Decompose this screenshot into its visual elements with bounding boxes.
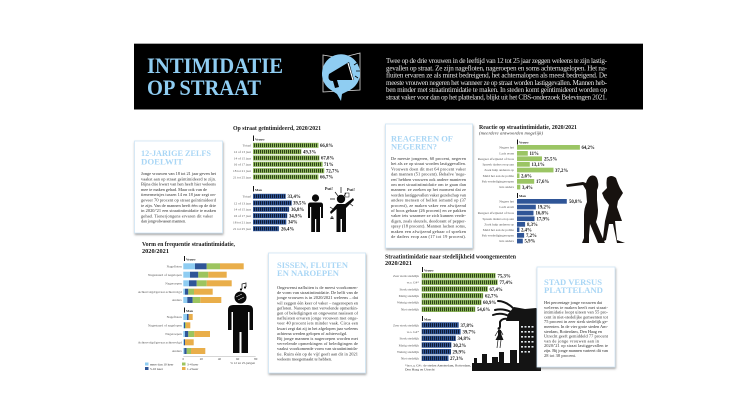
body text: vervelende opmerkingen of beledigingen de [277, 341, 358, 346]
bars: man: 37,8% [460, 324, 474, 329]
body text: de vorm van straatintimidatie. De helft van de [277, 290, 358, 295]
bars: man: Weinig stedelijk [397, 350, 419, 354]
bars: vrouw: Reageer afwijzend of boos [478, 157, 515, 161]
body text: spray (18 procent). Mannen lachen soms, [391, 224, 466, 230]
body text: Vrouwen doen dit met 64 procent vaker [391, 166, 467, 171]
bars: vrouw: 18 tot 21 jaar [233, 169, 252, 173]
heading: REAGEREN OF [391, 134, 453, 144]
legend [145, 362, 199, 371]
icon: vrouw: Vrouw [255, 138, 265, 142]
body text: maken een afwijzend gebaar of spreken [391, 229, 467, 234]
bars: man: 18 tot 21 jaar [233, 220, 252, 224]
icon: man: Man [255, 188, 262, 192]
stacked bars: man: Nagestaard of nagelopen [148, 324, 182, 328]
bars: vrouw: 49,3% [303, 150, 316, 155]
heading: PLATTELAND [544, 285, 603, 295]
bars: vrouw: Negeer het [499, 146, 514, 150]
heading: SISSEN, FLUITEN [277, 260, 349, 270]
bars: man: 14 of 15 jaar [234, 208, 252, 212]
body text: Jonge vrouwen van 18 tot 21 jaar geven het [141, 171, 217, 176]
bars: man: 34% [288, 221, 298, 226]
bars: vrouw: Matig stedelijk [399, 294, 419, 298]
bars: vrouw: 21 tot 25 jaar [233, 175, 252, 179]
bars: man: 27,3% [450, 357, 463, 362]
title [147, 53, 283, 100]
axis: 80 [254, 357, 258, 361]
icon: standing person [308, 194, 323, 232]
body text: kwart zegt dat zij in het afgelopen jaar weleens [277, 326, 358, 331]
bars: man: Negeer het [499, 200, 514, 204]
chart title [142, 241, 235, 255]
bars: man: w.o. G4* [407, 330, 419, 334]
bars: vrouw: 77,4% [500, 281, 513, 286]
bars: man: Zeer sterk stedelijk [393, 323, 419, 327]
bars: vrouw: Iets anders [499, 185, 515, 189]
chart title: Vorm en frequentie straatintimidatie, [142, 241, 235, 248]
body text: vaakst voorkomende vorm van straatintimida- [277, 346, 359, 351]
bars: vrouw: Totaal [243, 144, 251, 148]
body text: dan mannen (51 procent). Behalve 'nege- [391, 172, 467, 177]
chart title: Reactie op straatintimidatie, 2020/2021 [479, 124, 577, 131]
body text: mee te maken gehad. Maar ook van de [141, 187, 207, 192]
body text: procent), ze maken vaker een afwijzend [391, 203, 467, 209]
bars: man [478, 199, 582, 245]
body text: mannen: ze zoeken op het moment dat ze [391, 187, 466, 192]
bars: man: Pak verdedigingswapen [482, 234, 514, 238]
bars: vrouw: 67,8% [321, 157, 334, 162]
bars: man [233, 194, 306, 232]
bars: man: 17,9% [536, 217, 550, 222]
bars: man: Iets anders [499, 239, 515, 243]
bars: vrouw: 11% [530, 152, 539, 157]
body text: of boos gebaar (26 procent) en ze pakken [391, 208, 467, 213]
body text [544, 300, 609, 358]
legend: 5-10 keer [150, 367, 164, 371]
chart title: 2020/2021 [385, 260, 412, 267]
heading: EN NAROEPEN [277, 268, 340, 278]
panel: stad versus platteland [537, 267, 615, 367]
chart: op straat geïntimideerd [233, 125, 339, 232]
icon: vrouw: Vrouw [519, 140, 529, 144]
intro text: ben minder met straatintimidatie te maken. In steden komt geïntimideerd worden op [386, 86, 607, 94]
title: OP STRAAT [147, 75, 261, 100]
footnote: *in o.a. G4 : de steden Amsterdam, Rotterdam, [405, 363, 471, 368]
bars: vrouw: 71% [324, 163, 334, 168]
icon: two women silhouettes [566, 175, 625, 243]
bars: vrouw: 72,7% [326, 169, 339, 174]
icon: city with giant claw [472, 301, 541, 371]
icon: man: Man [424, 318, 431, 322]
body text: wil zeggen één keer of vaker – nageroepen en [277, 300, 359, 305]
bars: vrouw: 66,8% [320, 144, 333, 149]
body text: vaakst aan op straat geïntimideerd te zijn. [141, 176, 216, 181]
bars: man: Matig stedelijk [399, 343, 419, 347]
stacked bars: vrouw [138, 263, 244, 303]
bars: vrouw [478, 145, 595, 191]
body text [276, 285, 359, 361]
body text: digen, zoals sleutels, deodorant of pepper- [391, 218, 467, 224]
body text: Het percentage jonge vrouwen dat [544, 300, 603, 305]
chart: naar stedelijkheid [385, 254, 517, 371]
bars: man: 39,5% [293, 202, 306, 207]
stacked bars: man [138, 314, 210, 354]
bars: vrouw: 16 of 17 jaar [234, 163, 252, 167]
body text: zijn. Bij jonge mannen varieert dit van [544, 348, 609, 353]
body text: 28 tot 38 procent. [544, 353, 576, 358]
heading [277, 260, 349, 278]
bars: vrouw [393, 273, 513, 313]
bars: vrouw: 75,3% [498, 274, 511, 280]
body text: geveer 70 procent op straat geïntimideerd [141, 198, 217, 202]
panel: sissen, fluiten en naroepen [268, 253, 366, 373]
footnote [405, 363, 471, 371]
chart title [479, 124, 577, 136]
panel: 12-jarige zelfs doelwit [134, 141, 222, 233]
heading [391, 134, 453, 152]
heading [544, 277, 603, 295]
body text: ren' hebben vrouwen ook andere manieren [391, 177, 467, 182]
bars: vrouw: 25,5% [544, 158, 557, 162]
bars: vrouw: 2,6% [521, 174, 532, 180]
axis: 60 [236, 357, 240, 361]
bars: man: 7,2% [526, 234, 537, 239]
bars: man: 2,4% [521, 228, 532, 233]
bars: man: 29,9% [452, 350, 466, 356]
icon: vrouw: Vrouw [424, 268, 434, 272]
bars: vrouw: Pak verdedigingswapen [482, 180, 514, 184]
bars: man: 19,2% [538, 206, 551, 211]
bars: man: 36,8% [291, 208, 304, 213]
axis: 20 [200, 357, 203, 361]
chart title: (meerdere antwoorden mogelijk) [479, 130, 543, 136]
body text: meenten. In de vier grote steden Am- [544, 324, 609, 329]
bars: man: 30,2% [453, 344, 466, 349]
bars: man: 50,8% [569, 200, 582, 205]
bars: vrouw: 64,2% [582, 146, 595, 151]
bars: man: 26,4% [281, 227, 294, 232]
body text [391, 156, 467, 239]
bars: vrouw: 3,4% [522, 186, 533, 191]
axis: 40 [218, 357, 222, 361]
body text: cent in niet-stedelijke gemeenten tot [544, 314, 609, 319]
intro text [386, 57, 608, 102]
icon: person with music [228, 283, 253, 353]
bars: man: 33,4% [288, 195, 301, 200]
body text: De meeste jongeren, 60 procent, negeren [391, 156, 467, 162]
bars: vrouw: w.o. G4* [407, 281, 419, 285]
body text: jonge vrouwen is in 2020/2021 weleens – dat [276, 295, 359, 300]
body text: Utrecht geeft gemiddeld 77 procent [544, 334, 609, 339]
bars: vrouw: 67,4% [490, 288, 503, 293]
stacked bars: man: Nageroepen [165, 332, 182, 336]
body text: te zijn. Van de mannen heeft één op de drie [141, 203, 216, 208]
intro text: meeste vrouwen negeren het wanneer ze op straat worden lastiggevallen. Mannen heb- [386, 79, 608, 87]
body text: om met straatintimidatie om te gaan dan [391, 182, 467, 187]
icon: shouting person: Psst! [325, 187, 333, 191]
intro text: straat vaker voor dan op het platteland, blijkt uit het CBS-onderzoek Belevingen 2021. [386, 94, 607, 102]
body text: Bijna drie kwart van hen heeft hier weleens [141, 182, 216, 187]
bars: vrouw: Zeer sterk stedelijk [393, 274, 419, 278]
bars: man: Spreek daders erop aan [482, 217, 514, 221]
heading: STAD VERSUS [544, 277, 602, 287]
body text: van de jonge vrouwen aan in [544, 338, 600, 343]
body text: nafluisten ervaren jonge vrouwen met onge- [277, 316, 359, 321]
body text: tie. Ruim één op de vijf geeft aan dit in 2021 [277, 351, 358, 356]
bars: man: Totaal [243, 195, 251, 199]
bars: vrouw: Niet stedelijk [401, 308, 419, 312]
chart title: 2020/2021 [142, 248, 169, 255]
legend: meer dan 10 keer [150, 362, 174, 366]
chart: vorm en frequentie [138, 241, 258, 371]
bars: vrouw: 14 of 15 jaar [234, 156, 252, 160]
chart title [385, 254, 517, 267]
bars: man: Sterk stedelijk [400, 337, 419, 341]
chart: reactie op straatintimidatie [478, 124, 595, 245]
bars: vrouw: Sterk stedelijk [400, 287, 419, 291]
bars: man [393, 322, 476, 362]
stacked bars: vrouw: Anders [172, 298, 182, 302]
bars: vrouw: Spreek daders erop aan [482, 162, 514, 166]
bars: man: 16,8% [536, 212, 549, 217]
bars: vrouw: Weinig stedelijk [397, 301, 419, 305]
heading [141, 148, 211, 166]
stacked bars: vrouw: Achtervolgd/gevaar achtervolgd [138, 290, 182, 294]
axis: % 12 tot 25-jarigen [230, 361, 255, 365]
bars: man: Zoek hulp anderen op [484, 222, 514, 226]
chart title: Op straat geïntimideerd, 2020/2021 [233, 125, 321, 132]
body text: tienermeisjes tussen 14 en 18 jaar zegt on- [141, 192, 217, 197]
icon: shouting person [325, 187, 355, 232]
body text: gen of beledigingen en ongewenst nasissen of [277, 310, 359, 316]
stacked bars: man: Anders [172, 349, 182, 353]
bars: vrouw: 12 of 13 jaar [234, 150, 252, 154]
body text: veer 40 procent iets minder vaak. Circa een [277, 321, 359, 326]
icon: man: Man [519, 194, 526, 198]
panel: reageren of negeren [386, 124, 472, 248]
bars: vrouw: Zoek hulp anderen op [484, 168, 514, 172]
bars: vrouw: Lach erom [499, 152, 514, 156]
axis: 0 [183, 357, 185, 361]
body text: de daders erop aan (17 tot 19 procent). [391, 234, 466, 239]
stacked bars: man: Nagefloten [167, 315, 182, 319]
title: INTIMIDATIE [147, 53, 283, 78]
bars: vrouw: 66,7% [320, 176, 333, 181]
bars: vrouw [233, 143, 339, 181]
bars: vrouw: 37,2% [555, 169, 568, 174]
bars: vrouw: 60,9% [483, 301, 496, 306]
body text: Ongewenst nafluiten is de meest voorkomen- [277, 285, 359, 290]
legend: 1-2 keer [187, 367, 199, 371]
bars: man: 21 tot 25 jaar [233, 227, 252, 231]
body text: vaker iets waarmee ze zich kunnen verde- [391, 213, 467, 218]
icon: vrouw: Vrouw [186, 258, 196, 262]
stacked bars: vrouw: Nagestaard of nagelopen [148, 273, 182, 277]
stacked bars: vrouw: Nageroepen [165, 282, 182, 286]
footnote: Den Haag en Utrecht [405, 367, 435, 371]
body text: Bij jonge mannen is nageroepen worden met [277, 336, 359, 341]
bars: man: 34,9% [289, 214, 302, 219]
axis [183, 356, 258, 365]
header banner [134, 43, 643, 110]
bars: man: Reageer afwijzend of boos [478, 211, 515, 215]
bars: man: Meld het aan de politie [483, 228, 514, 232]
bars: man: 34,8% [458, 337, 471, 342]
bars: vrouw: 13,1% [532, 163, 545, 168]
intro text: gevallen op straat. Ze zijn nagefloten, nageroepen en soms achternagelopen. Het na- [386, 64, 608, 72]
bars: man: 16 of 17 jaar [234, 214, 252, 218]
heading: NEGEREN? [391, 142, 437, 152]
icon: megaphone [322, 53, 360, 101]
body text: 2020/'21 op straat lastiggevallen te [544, 343, 608, 348]
bars: vrouw: 17,6% [536, 180, 549, 185]
bars: vrouw: Meld het aan de politie [483, 174, 514, 178]
bars: man: Niet stedelijk [401, 357, 419, 361]
body text: weleens meegemaakt te hebben. [277, 356, 332, 361]
heading: DOELWIT [141, 156, 183, 166]
body text: worden lastiggevallen vaker gezelschap van [391, 192, 467, 197]
body text: intimidatie loopt uiteen van 55 pro- [544, 310, 609, 315]
bars: man: 12 of 13 jaar [234, 201, 252, 205]
intro text: fluiten ervaren ze als minst bedreigend, het achternalopen als meest bedreigend. De [386, 72, 607, 80]
body text [141, 171, 217, 224]
heading: 12-JARIGE ZELFS [141, 148, 211, 158]
bars: man: Lach erom [499, 205, 514, 209]
icon: shouting person: Psst! [347, 188, 355, 192]
icon: man: Man [186, 309, 193, 313]
bars: vrouw: 54,6% [477, 308, 490, 313]
body text: dan jongvolwassen mannen. [141, 219, 186, 224]
body text: het als ze op straat worden lastiggevallen. [391, 161, 466, 166]
stacked bars: vrouw: Nagefloten [167, 264, 182, 268]
body text: sterdam, Rotterdam, Den Haag en [544, 329, 603, 335]
stacked bars: man: Achtervolgd/gevaar achtervolgd [138, 340, 182, 344]
intro text: Twee op de drie vrouwen in de leeftijd van 12 tot 25 jaar zeggen weleens te zijn lastig- [386, 57, 608, 65]
body text: gefloten. Naroepen met vervelende opmerkin- [277, 305, 359, 310]
body text: in 2020/'21 een straatintimidatie te maken [141, 208, 217, 213]
bars: vrouw: 62,7% [485, 294, 498, 300]
body text: gehad. Tienerjongens ervaren dit vaker [141, 213, 214, 218]
body text: achterna werden gelopen of achtervolgd. [277, 331, 347, 336]
body text: 75 procent in zeer sterk stedelijk ge- [544, 319, 609, 324]
body text: andere mensen of bellen iemand op (37 [391, 198, 467, 203]
bars: man: 39,7% [462, 330, 476, 336]
chart title: Straatintimidatie naar stedelijkheid woongemeenten [385, 254, 517, 261]
legend: 3-4 keer [187, 362, 199, 366]
bars: man: 5,9% [524, 240, 535, 245]
body text: weleens te maken heeft met straat- [544, 305, 609, 310]
bars: man: 8,3% [527, 223, 538, 228]
